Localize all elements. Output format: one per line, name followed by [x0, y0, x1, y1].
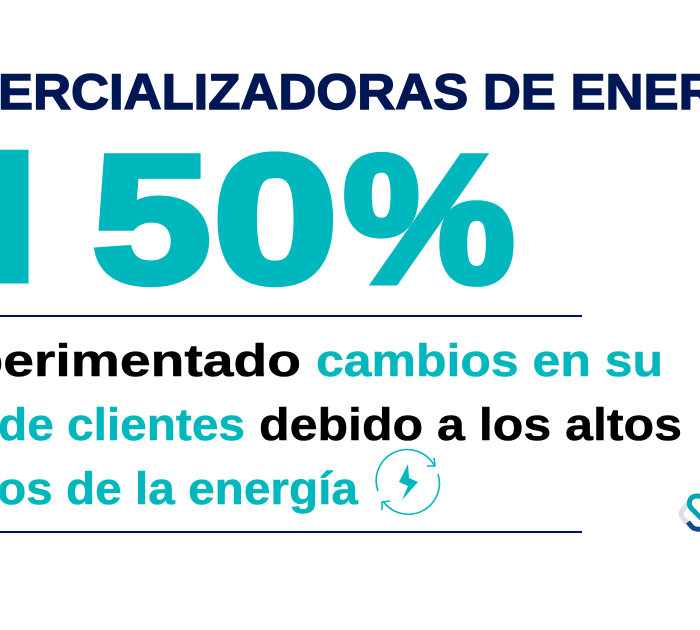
top divider [0, 315, 582, 317]
body text [0, 335, 682, 514]
body text: os de la energía [0, 463, 359, 514]
big percentage: 0 [213, 117, 338, 321]
bottom divider [0, 531, 582, 533]
body text: debido a los altos [259, 399, 682, 450]
body text: cambios en su [316, 335, 663, 386]
big percentage: 5 [92, 117, 211, 321]
big percentage [0, 111, 515, 323]
body text: de clientes [0, 399, 245, 450]
icon: energy cycle [376, 450, 439, 514]
icon: logo [681, 496, 700, 529]
big percentage: % [343, 117, 515, 321]
